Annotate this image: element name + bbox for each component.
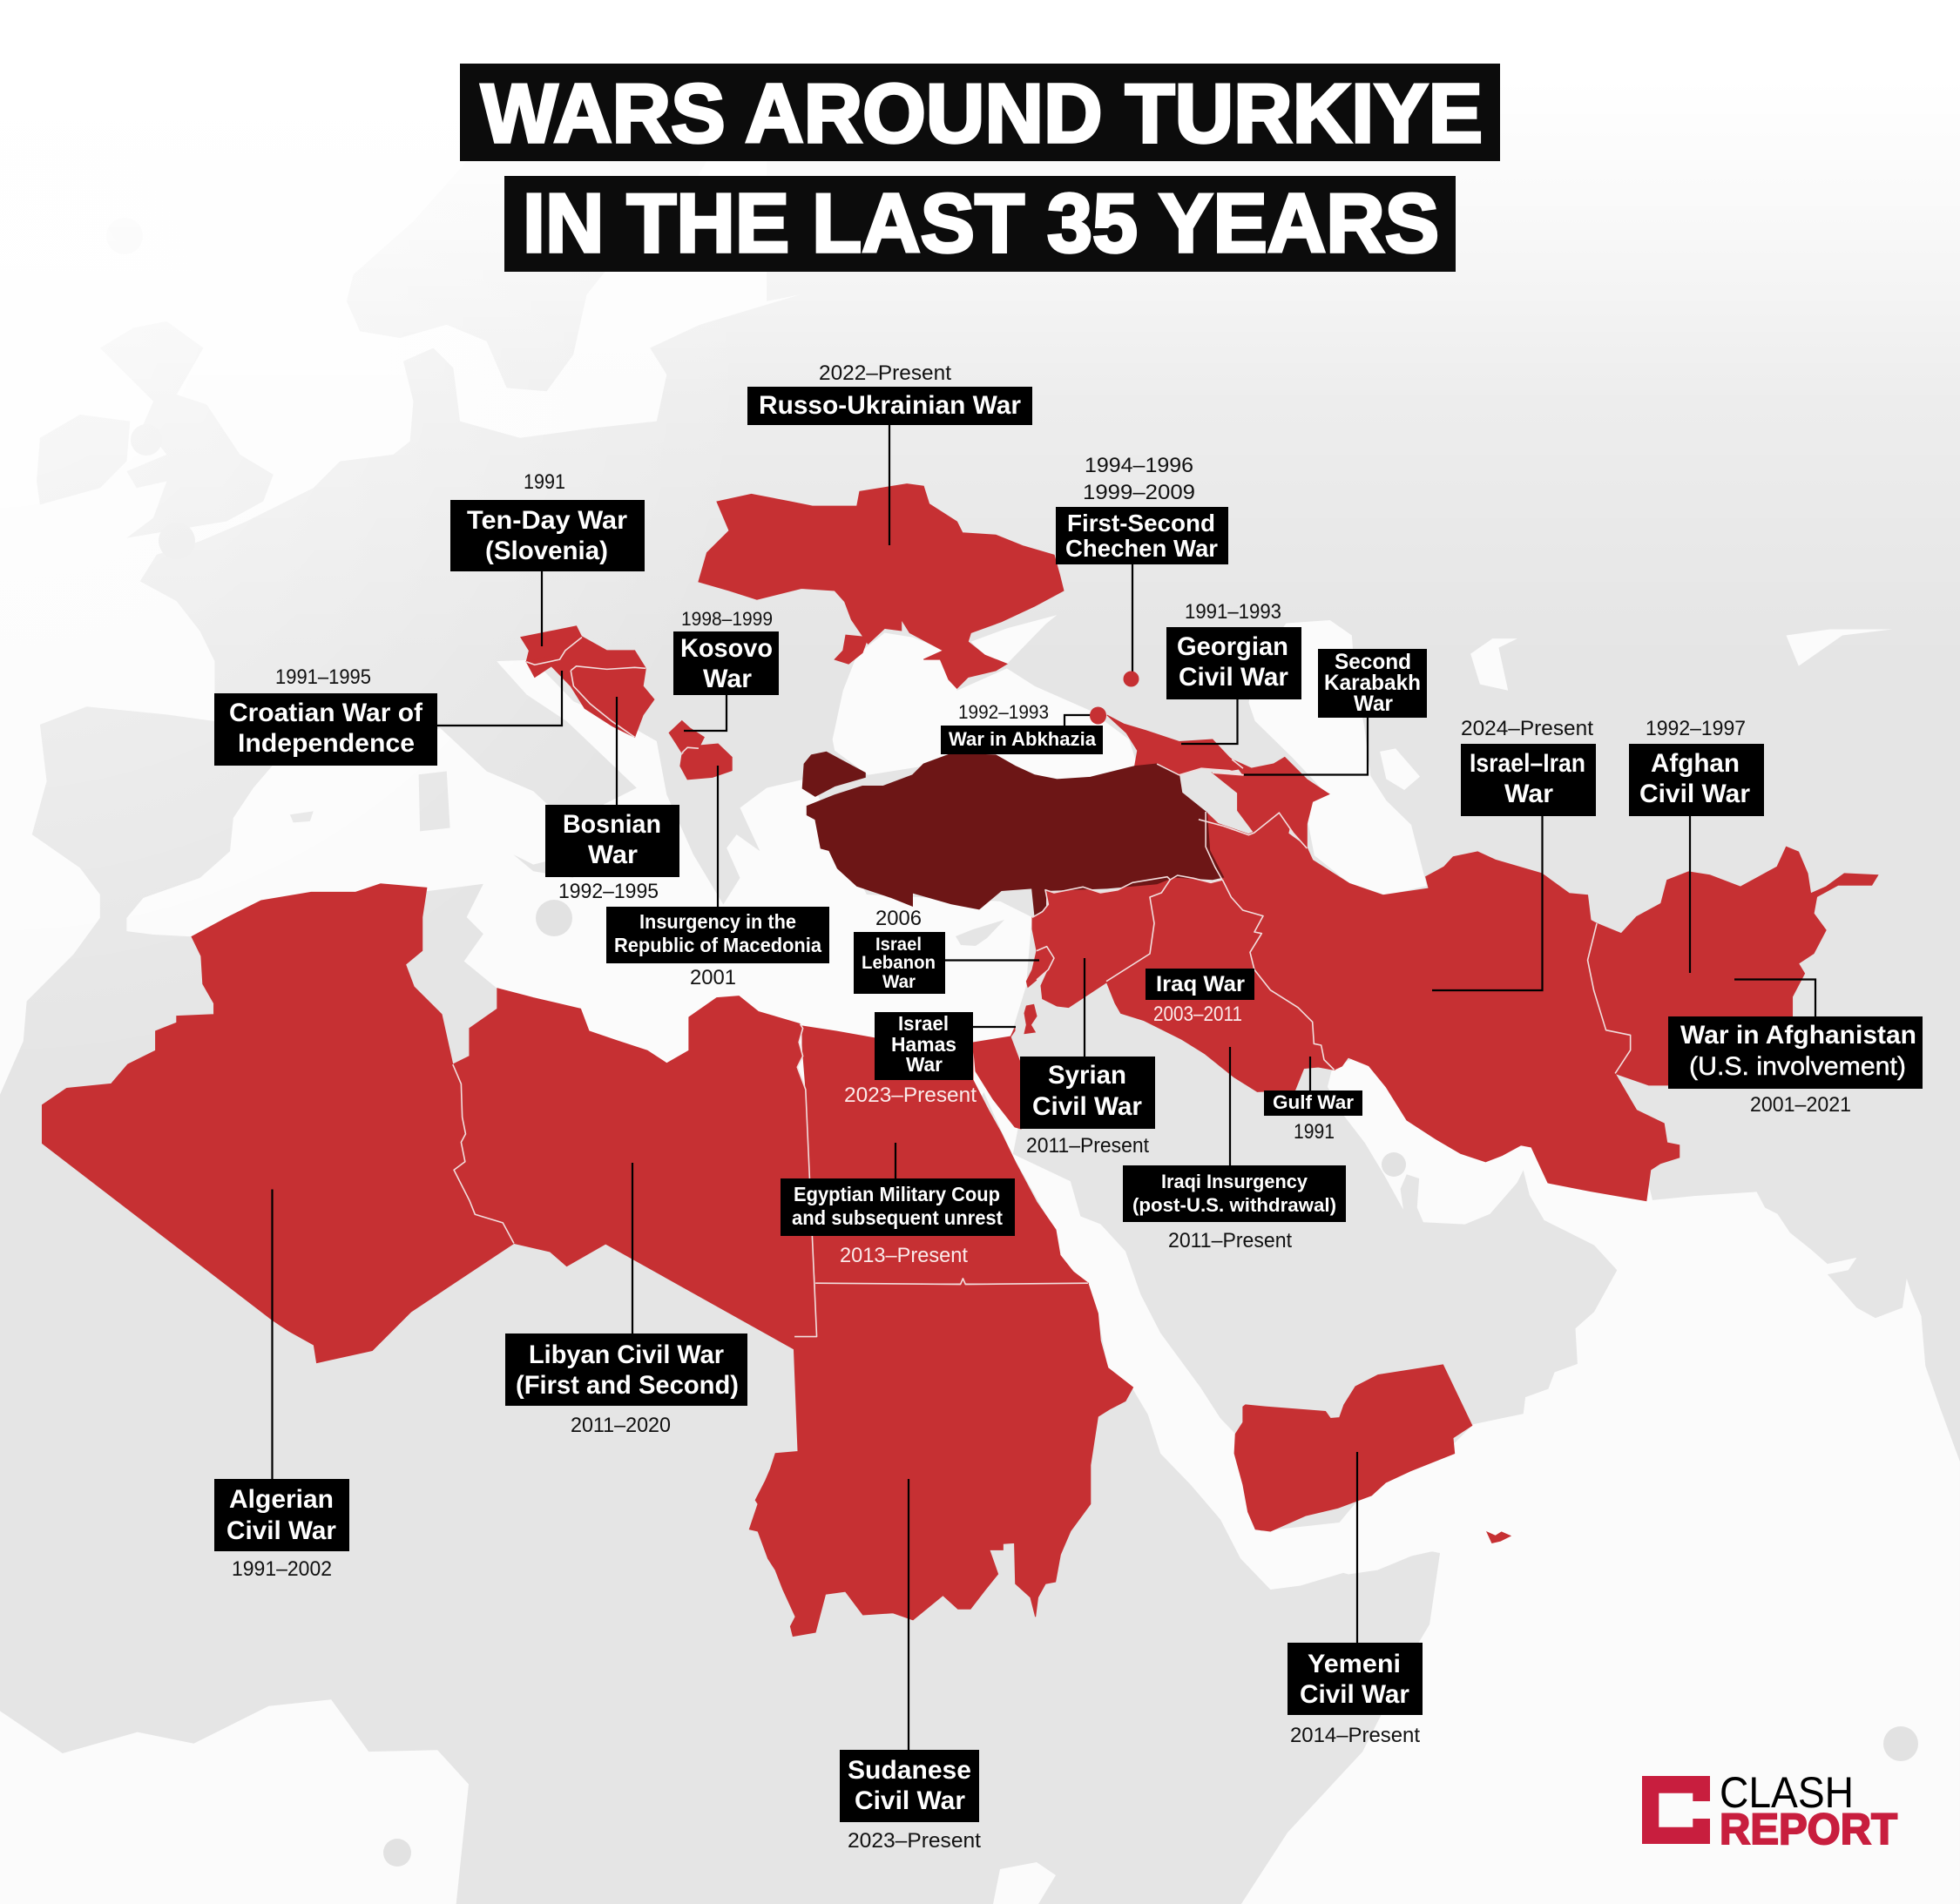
country: Ukraine Odesa coast [835, 635, 868, 664]
label: Israel Hamas War: Hamas [891, 1033, 956, 1056]
label: Iraq War: 2003–2011 [1153, 1003, 1242, 1026]
label: Egyptian Military Coup: 2013–Present [840, 1244, 968, 1267]
land: Sardinia [419, 771, 450, 831]
label: Georgian Civil War: Georgian [1177, 632, 1288, 661]
land: Great Britain [100, 321, 274, 538]
countries in zoom group D [1010, 875, 1335, 1091]
country: North Macedonia [680, 744, 732, 780]
sea: Black Sea [833, 633, 1138, 784]
label: Bosnian War: War [588, 841, 638, 869]
label: Second Karabakh War: War [1354, 692, 1393, 716]
logo: Clash Report [1642, 1768, 1897, 1853]
label: Second Karabakh War [1244, 649, 1427, 775]
label: War in Afghanistan: War in Afghanistan [1680, 1021, 1916, 1050]
label: First-Second Chechen War: First-Second [1067, 510, 1215, 537]
label: Insurgency in the Republic of Macedonia [606, 766, 829, 989]
label: Russo-Ukrainian War: 2022–Present [819, 361, 951, 385]
label: Algerian Civil War: Civil War [226, 1516, 336, 1545]
country: Turkey Thrace [802, 752, 865, 796]
label: Iraq War: Iraq War [1156, 972, 1245, 996]
country: Ukraine [699, 484, 1064, 688]
label: Bosnian War: Bosnian [563, 810, 661, 839]
label: War in Abkhazia: War in Abkhazia [949, 728, 1097, 750]
logo mark [1642, 1776, 1710, 1844]
country: Lebanon [1026, 947, 1054, 987]
label: Israel–Iran War: 2024–Present [1461, 717, 1593, 740]
label: Israel–Iran War [1432, 717, 1596, 990]
label: Kosovo War: War [703, 665, 752, 693]
label: Algerian Civil War [214, 1190, 349, 1581]
label: Afghan Civil War: Civil War [1639, 780, 1750, 808]
country: Afghanistan [1588, 847, 1878, 1085]
label: Israel Hamas War: War [906, 1053, 943, 1076]
label: Russo-Ukrainian War [747, 361, 1032, 545]
label: War in Afghanistan: 2001–2021 [1750, 1093, 1851, 1117]
label: Israel Lebanon War: War [882, 972, 916, 992]
label: Ten-Day War: 1991 [524, 470, 565, 494]
label: Libyan Civil War: Libyan Civil War [529, 1340, 724, 1369]
label: First-Second Chechen War: 1994–1996 [1085, 454, 1193, 477]
country: Kosovo [669, 721, 704, 753]
country: Turkey Anatolia [807, 753, 1224, 915]
label: Sudanese Civil War: Sudanese [848, 1756, 971, 1785]
label: War in Afghanistan: (U.S. involvement) [1689, 1052, 1906, 1081]
label: Kosovo War: Kosovo [680, 634, 773, 663]
lake: Victoria [993, 1862, 1056, 1904]
label: Israel Lebanon War: Lebanon [862, 953, 936, 973]
logo wordmark: REPORT: REPORT [1720, 1805, 1897, 1853]
label: Sudanese Civil War: 2023–Present [848, 1829, 981, 1853]
label: Insurgency in the Republic of Macedonia: 2001 [690, 966, 736, 989]
label: Iraqi Insurgency: Iraqi Insurgency [1161, 1171, 1308, 1192]
label: Yemeni Civil War: 2014–Present [1290, 1724, 1420, 1747]
label: Second Karabakh War: Karabakh [1324, 671, 1421, 695]
label: Iraqi Insurgency [1123, 1047, 1346, 1252]
country: Iran [1206, 812, 1680, 1201]
lake: Balkhash [1786, 630, 1892, 666]
label: Gulf War: Gulf War [1273, 1091, 1354, 1113]
label: Sudanese Civil War: Civil War [855, 1786, 965, 1815]
logo wordmark: CLASH: CLASH [1720, 1768, 1854, 1817]
lake: Aral [1470, 638, 1517, 691]
label: Syrian Civil War [1020, 958, 1155, 1158]
country: Yemen [1234, 1365, 1472, 1531]
label: Libyan Civil War: (First and Second) [516, 1371, 739, 1400]
white country borders [453, 812, 1631, 1337]
label: Croatian War of Independence: Croatian War of [229, 699, 423, 727]
country: Egypt Sinai [973, 1036, 1021, 1129]
sea: Red Sea and Gulf of Aden [973, 1069, 1436, 1590]
label: Gulf War [1264, 1057, 1362, 1144]
map background: Black Sea and Azov [833, 615, 1138, 784]
label: Yemeni Civil War: Yemeni [1308, 1650, 1401, 1678]
country: Gaza [1010, 1028, 1015, 1037]
label: War in Abkhazia [941, 701, 1106, 754]
inner borders Balkans and Caucasus [526, 638, 1307, 848]
label: Ten-Day War: (Slovenia) [485, 537, 608, 565]
label: Yemeni Civil War: Civil War [1300, 1680, 1409, 1709]
label: Insurgency in the Republic of Macedonia: Insurgency in the [639, 910, 796, 933]
label: Yemeni Civil War [1288, 1452, 1423, 1747]
sea: Gulf of Guinea [0, 1699, 469, 1904]
label: Israel Lebanon War: Israel [875, 935, 922, 955]
label: Egyptian Military Coup: Egyptian Military Coup [794, 1183, 1000, 1205]
label: First-Second Chechen War [1056, 454, 1228, 686]
label: War in Afghanistan [1668, 979, 1923, 1117]
label: Afghan Civil War: Afghan [1651, 749, 1740, 778]
label: Sudanese Civil War [840, 1479, 981, 1853]
country: Slovenia [521, 626, 582, 662]
country: Algeria [42, 884, 514, 1363]
left white fade [0, 0, 871, 1132]
title line 2: IN THE LAST 35 YEARS [523, 177, 1439, 270]
label: Afghan Civil War [1629, 717, 1764, 973]
label: First-Second Chechen War: Chechen War [1065, 535, 1218, 562]
land: Mallorca [290, 811, 314, 822]
label: Iraq War [1146, 969, 1254, 1026]
label: Russo-Ukrainian War: Russo-Ukrainian War [759, 391, 1021, 420]
label: Algerian Civil War: Algerian [229, 1485, 334, 1514]
label: Kosovo War: 1998–1999 [681, 608, 773, 630]
map background: Caspian and Central Asian lakes [1248, 620, 1892, 895]
countries in zoom group B [749, 1279, 1511, 1637]
label: Israel–Iran War: War [1504, 780, 1553, 808]
countries in zoom group A [42, 884, 817, 1363]
label: Afghan Civil War: 1992–1997 [1646, 717, 1746, 740]
label: Libyan Civil War: 2011–2020 [571, 1414, 671, 1437]
label: Georgian Civil War: Civil War [1179, 663, 1288, 692]
sea: Azov [970, 615, 1057, 664]
country: Georgia [1107, 715, 1243, 775]
sea: Atlantic and Baltic [0, 0, 800, 1095]
country: Egypt mainland [802, 1026, 1088, 1283]
label: Egyptian Military Coup: and subsequent unrest [792, 1206, 1003, 1229]
label: Israel–Iran War: Israel–Iran [1470, 749, 1585, 778]
land: Sicily [513, 854, 573, 878]
label: Kosovo War [673, 608, 779, 731]
country: Croatia and Bosnia [526, 635, 654, 737]
top white fade [0, 0, 1960, 662]
label: First-Second Chechen War: 1999–2009 [1083, 481, 1195, 504]
land: Scandinavia [347, 61, 767, 391]
land: Cyprus [956, 920, 1004, 946]
label: Ten-Day War [450, 470, 645, 646]
country: Syria [1032, 877, 1170, 1008]
country: Azerbaijan [1213, 757, 1329, 848]
label: Ten-Day War: Ten-Day War [467, 506, 627, 535]
title line 1: WARS AROUND TURKIYE [481, 67, 1483, 160]
sea: Caspian [1248, 620, 1427, 895]
land: Ireland [37, 415, 130, 504]
country: Sudan [749, 1279, 1133, 1637]
label: Georgian Civil War: 1991–1993 [1185, 600, 1281, 624]
label: Croatian War of Independence: Independence [238, 729, 415, 758]
map background: seas and islands, west [0, 0, 1032, 1128]
label: Croatian War of Independence: 1991–1995 [275, 665, 371, 689]
label: Second Karabakh War: Second [1335, 650, 1411, 674]
label: Insurgency in the Republic of Macedonia: Republic of Macedonia [614, 934, 821, 956]
label: Gulf War: 1991 [1294, 1120, 1335, 1144]
country: West Bank [1024, 1004, 1037, 1034]
label: Iraqi Insurgency: (post-U.S. withdrawal) [1132, 1194, 1336, 1216]
label: Syrian Civil War: Civil War [1032, 1092, 1142, 1121]
label: War in Abkhazia: 1992–1993 [958, 701, 1049, 723]
label: Israel Lebanon War [854, 907, 1039, 994]
label: Israel Hamas War [844, 1012, 1016, 1107]
label: Israel Hamas War: 2023–Present [844, 1084, 977, 1107]
label: Syrian Civil War: 2011–Present [1026, 1134, 1149, 1158]
sea: Kara-Bogaz bay [1380, 748, 1420, 790]
label: Croatian War of Independence [214, 665, 562, 766]
country: Libya [453, 989, 817, 1349]
label: Iraqi Insurgency: 2011–Present [1168, 1229, 1292, 1252]
country: Iraq [1106, 875, 1335, 1091]
sea: Mediterranean [126, 660, 1032, 1128]
label: Libyan Civil War [505, 1163, 747, 1437]
label: Algerian Civil War: 1991–2002 [232, 1557, 332, 1581]
label: Syrian Civil War: Syrian [1048, 1061, 1126, 1090]
label: Egyptian Military Coup [781, 1143, 1015, 1267]
label: Bosnian War [545, 697, 679, 903]
label: Georgian Civil War [1166, 600, 1301, 744]
label: Bosnian War: 1992–1995 [558, 880, 659, 903]
country: Socotra [1487, 1532, 1511, 1543]
countries in zoom group C [1206, 812, 1878, 1201]
sea: Persian Gulf and Indian Ocean [1231, 1054, 1960, 1904]
label: Israel Lebanon War: 2006 [875, 907, 922, 930]
countries in zoom group E [521, 484, 1329, 915]
label: Israel Hamas War: Israel [898, 1012, 949, 1035]
